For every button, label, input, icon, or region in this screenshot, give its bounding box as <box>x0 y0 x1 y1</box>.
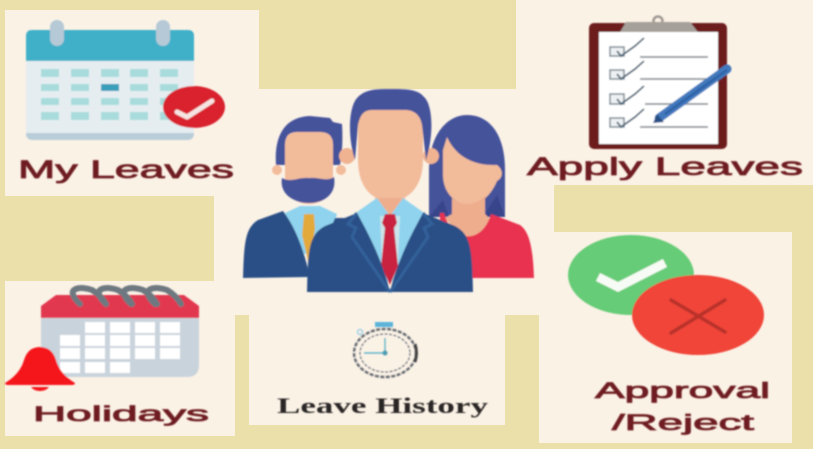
icon: red bell <box>5 347 75 391</box>
icon: green check circle <box>568 235 694 315</box>
panel: leave history <box>277 322 488 418</box>
label: approval: Approval <box>595 378 770 403</box>
icon: teal calendar <box>26 20 194 140</box>
figure: central man <box>307 89 473 292</box>
panel: approval / reject <box>568 235 770 435</box>
label: leave history: Leave History <box>277 393 488 418</box>
figure: woman <box>429 115 534 278</box>
label: holidays: Holidays <box>33 403 209 426</box>
panel: team illustration <box>243 89 534 292</box>
label: apply leaves: Apply Leaves <box>527 153 803 181</box>
icon: stopwatch <box>354 322 416 377</box>
icon: red check badge <box>163 86 225 128</box>
icon: red reject circle <box>632 275 764 355</box>
panel: my leaves <box>18 20 234 184</box>
label: my leaves: My Leaves <box>18 156 234 184</box>
icon: blue pen <box>653 69 727 123</box>
panel: holidays <box>5 288 209 426</box>
icon: red calendar <box>41 288 199 377</box>
figure: bearded man <box>243 116 350 278</box>
panel: apply leaves <box>527 16 803 181</box>
icon: clipboard <box>589 16 727 149</box>
label: reject: /Reject <box>612 410 754 435</box>
